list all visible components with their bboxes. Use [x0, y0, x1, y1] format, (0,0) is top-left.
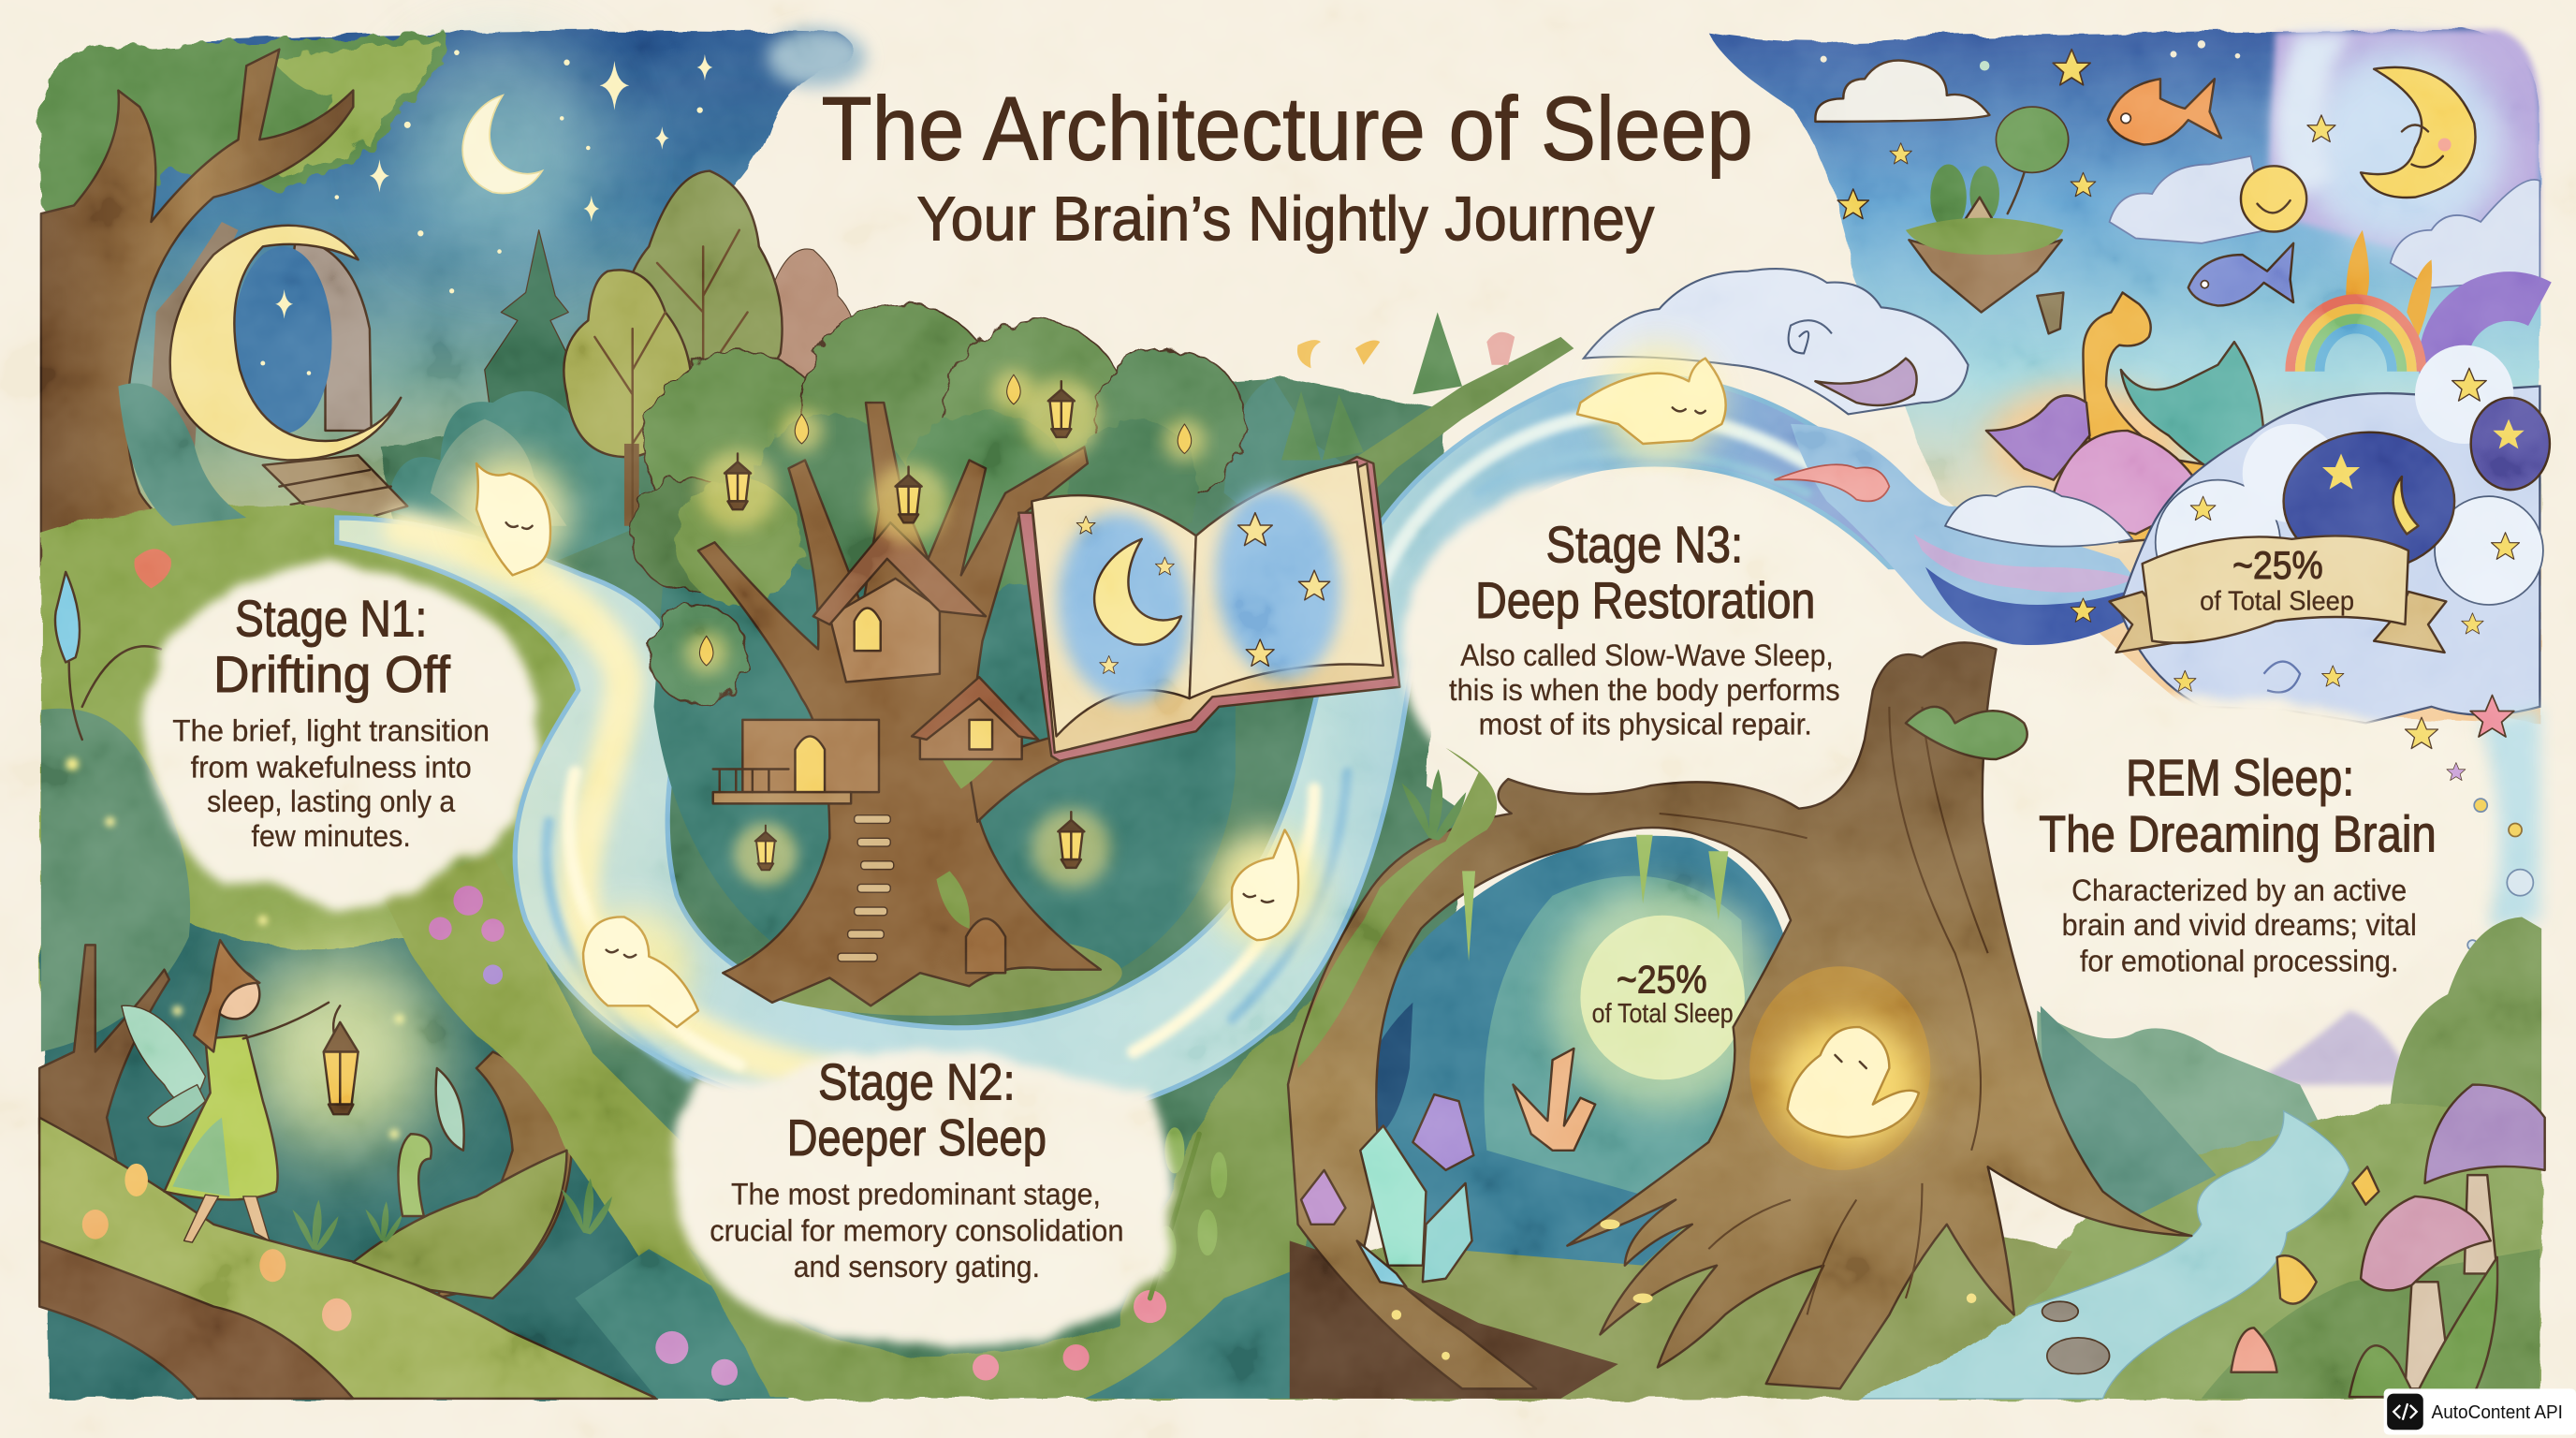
sun-lit leaves — [250, 39, 437, 174]
lanterns — [698, 378, 1110, 888]
ribbon banner — [2110, 536, 2446, 653]
trunk and branches — [41, 50, 353, 567]
forest base under the river — [378, 378, 1479, 1399]
text block: stage N2 — [710, 1053, 1123, 1284]
ladder — [838, 815, 894, 961]
pink distant tree — [764, 249, 856, 427]
right page — [1190, 462, 1383, 698]
cloud bank stars — [2071, 368, 2520, 691]
crystals — [1301, 1094, 1473, 1287]
head and hair — [211, 970, 259, 1019]
moss bank beside river — [386, 855, 755, 1314]
book stars — [1076, 513, 1330, 673]
grass tuft — [1401, 770, 1466, 841]
door — [966, 918, 1005, 973]
tall olive tree — [621, 171, 783, 419]
navy starry bubble — [2284, 433, 2454, 570]
front yellow tree — [564, 270, 692, 457]
text block: stage N2: Stage N2: — [818, 1053, 1016, 1110]
dark forest disc — [654, 550, 1236, 1009]
text block: REM sleep: for emotional processing. — [2080, 944, 2398, 977]
small flowers — [2231, 1167, 2378, 1372]
pale moon halo — [2300, 46, 2504, 250]
crescent gate — [170, 226, 401, 461]
lavender swirl — [2267, 30, 2539, 287]
moon glow — [399, 50, 603, 253]
watermark: AutoContent API — [2432, 1402, 2563, 1423]
dots — [1821, 40, 2240, 70]
cloud curl — [1789, 320, 1832, 353]
text block: stage N1 — [172, 590, 490, 853]
side branch — [970, 730, 1134, 822]
glowing currents — [402, 414, 1914, 1085]
text block: stage N2: The most predominant stage, — [731, 1178, 1101, 1211]
foreground leaves — [2349, 1257, 2497, 1397]
text block: stage N3: Stage N3: — [1546, 516, 1743, 573]
tulips — [82, 1164, 352, 1331]
lilac whale — [1815, 359, 1917, 405]
root trunk — [435, 1051, 572, 1299]
callout: N3 share — [1592, 957, 1734, 1029]
river of sleep — [337, 375, 1939, 1129]
pink flowers — [429, 886, 505, 985]
stones — [2042, 1301, 2110, 1374]
deep root tree — [1288, 642, 2191, 1399]
cloud with swirl — [1584, 269, 1969, 414]
rem bubbles — [2467, 799, 2533, 950]
navy band — [1925, 567, 2152, 645]
bottom ground centre — [575, 1003, 1314, 1399]
yellow horn — [2346, 230, 2432, 337]
hills — [2037, 1011, 2333, 1249]
arm and lantern handle — [243, 1003, 340, 1044]
cream fade edge — [1725, 102, 1856, 337]
text block: stage N2: and sensory gating. — [794, 1250, 1040, 1284]
purple critter — [1986, 395, 2089, 480]
mountain — [2250, 1011, 2415, 1085]
scene: dream sky — [1584, 30, 2539, 723]
yellow dino — [2083, 292, 2291, 542]
small rock — [2037, 292, 2063, 333]
lantern light — [238, 950, 442, 1153]
right trees — [2391, 917, 2541, 1134]
stars — [1837, 50, 2335, 219]
icon: fairy lantern — [324, 1022, 359, 1114]
glowing pebbles — [1392, 1220, 1976, 1360]
blue lily left — [55, 549, 171, 740]
cream below N3 — [1922, 649, 2185, 772]
cave — [1363, 836, 1794, 1266]
dress — [165, 1035, 278, 1199]
scene: forest night sky — [50, 28, 866, 559]
dark foreground green — [2202, 1249, 2539, 1399]
forest lower left — [39, 709, 788, 1399]
page edges — [1032, 463, 1393, 753]
text block: REM sleep: The Dreaming Brain — [2039, 805, 2437, 862]
text block: REM sleep: brain and vivid dreams; vital — [2062, 908, 2417, 942]
lilac band — [1914, 535, 2136, 593]
pale sky arc — [2274, 33, 2352, 198]
cave light — [1551, 886, 1775, 1109]
blue fish — [2188, 243, 2293, 306]
winding stream — [1843, 1111, 2349, 1399]
canopy — [631, 304, 1245, 703]
book moon — [1094, 539, 1181, 645]
wings — [122, 1005, 205, 1104]
teal hill — [2041, 1005, 2217, 1216]
N3 text clearing — [1403, 473, 1903, 787]
stone arch — [292, 239, 372, 431]
pine tree — [485, 230, 575, 431]
rem blue strip — [2481, 707, 2539, 929]
bark lines — [1660, 707, 1988, 1314]
trunk and branches — [698, 403, 1101, 1005]
crescent moon — [462, 95, 542, 194]
text block: stage N1: from wakefulness into — [191, 750, 472, 784]
moss on arch — [1298, 748, 1497, 1068]
violet starry bubble — [2471, 398, 2550, 490]
porch cabin — [713, 720, 879, 803]
title: The Architecture of Sleep — [822, 79, 1753, 179]
dark pocket — [1357, 1003, 1412, 1142]
text block: stage N2: crucial for memory consolidation — [710, 1213, 1123, 1247]
pine hedge on river bank — [1224, 313, 1573, 550]
spirit N3 right of tree — [1209, 829, 1321, 944]
text block: stage N3: Also called Slow-Wave Sleep, — [1460, 638, 1834, 672]
fairy with lantern — [122, 940, 340, 1242]
leaf plants — [436, 1068, 464, 1151]
watermark — [2384, 1388, 2576, 1434]
text block: stage N2: Deeper Sleep — [787, 1109, 1046, 1167]
text block: stage N1: The brief, light transition — [172, 714, 490, 748]
background trees — [148, 171, 856, 567]
watercolor washes — [1048, 506, 1199, 710]
left big tree — [39, 33, 446, 567]
text block: stage N1: few minutes. — [252, 819, 411, 853]
white puffs — [2156, 345, 2543, 605]
REM text clearing — [1963, 697, 2507, 1016]
tree with arch and roots — [1288, 642, 2191, 1388]
closed eyes — [1835, 1055, 1866, 1068]
text block: stage N3: Deep Restoration — [1475, 572, 1815, 629]
orange fish — [2108, 79, 2221, 144]
bush beside text — [41, 709, 190, 1051]
stars in the sky — [335, 50, 712, 293]
text block: REM sleep: Characterized by an active — [2071, 873, 2407, 907]
text block: stage N3: this is when the body performs — [1449, 673, 1840, 707]
orange crystals — [1513, 1049, 1595, 1151]
vine stalactites — [1462, 835, 1728, 961]
rem stars — [2406, 696, 2514, 781]
cave inner — [1484, 876, 1749, 1199]
teal bushes — [386, 391, 641, 567]
left young tree — [39, 945, 169, 1266]
treehouse scene — [631, 304, 1245, 1016]
tree leaves — [1906, 707, 2027, 759]
slender trunks — [148, 222, 238, 461]
leaf glows — [685, 370, 1206, 674]
N2 text clearing — [673, 1049, 1172, 1346]
green whale — [2121, 342, 2264, 493]
text block: stage N1: sleep, lasting only a — [207, 785, 456, 818]
peach sunset glow — [1988, 387, 2185, 501]
moss — [929, 715, 1018, 929]
left tree canopy — [39, 33, 446, 217]
callout: REM share — [2200, 543, 2354, 616]
small cabin — [912, 677, 1038, 759]
moon arch doorway — [170, 226, 407, 529]
dream river tail — [1775, 424, 2152, 645]
legs — [184, 1195, 270, 1242]
portal sky — [233, 246, 332, 433]
spirit N1 — [457, 457, 568, 575]
sleeping spirit — [1788, 1027, 1919, 1137]
upper cabin — [813, 522, 986, 682]
spirit on river arch — [1577, 344, 1726, 462]
fireflies — [66, 757, 404, 1139]
callout: N3 share: of Total Sleep — [1592, 999, 1734, 1029]
floating island — [1906, 107, 2069, 313]
REM valley — [1843, 917, 2545, 1401]
text block: REM sleep: REM Sleep: — [2126, 750, 2354, 807]
teal bush by arch — [118, 383, 246, 526]
top cloud — [1815, 61, 1989, 122]
mossy ground — [39, 1118, 657, 1399]
grassy mound — [735, 931, 1122, 1016]
sky edge wash — [768, 28, 866, 87]
magic open book — [1018, 457, 1399, 761]
text block: REM sleep — [2039, 750, 2437, 977]
pink mushroom — [2361, 1196, 2491, 1388]
valley ground — [1939, 1101, 2541, 1401]
hollow glow — [1749, 966, 1930, 1170]
callout: REM share: ~25% — [2232, 543, 2323, 587]
rainbow — [2291, 297, 2539, 387]
stone steps — [263, 455, 407, 529]
text block: stage N1: Stage N1: — [235, 590, 427, 647]
cover — [1018, 457, 1399, 761]
small cloud — [1945, 487, 2132, 547]
fallen root — [39, 1240, 353, 1399]
ferns and flowers — [292, 1179, 741, 1382]
moss hill behind stage N1 — [41, 505, 587, 1019]
big smiling moon — [2361, 67, 2475, 198]
pink ribbon — [1775, 464, 1889, 501]
earth and moss ground — [1298, 1167, 2070, 1399]
sun face — [2241, 166, 2306, 232]
little clouds — [2110, 156, 2539, 287]
dark soil — [1290, 1240, 1618, 1399]
callout: N3 share: ~25% — [1617, 957, 1707, 1001]
purple mushroom — [2425, 1085, 2545, 1273]
callout: REM share: of Total Sleep — [2200, 586, 2354, 616]
second slope — [353, 1151, 567, 1299]
swirl — [2264, 662, 2300, 692]
text block: stage N3: most of its physical repair. — [1479, 708, 1812, 741]
left page — [1032, 495, 1196, 736]
text block: stage N1: Drifting Off — [213, 646, 451, 703]
N1 text clearing — [143, 559, 538, 909]
portal stars — [260, 289, 311, 375]
glowing glade bush — [431, 419, 567, 526]
dream cloud bank — [2071, 345, 2550, 723]
subtitle: Your Brain’s Nightly Journey — [916, 184, 1655, 254]
text block: stage N3 — [1449, 516, 1840, 741]
pink shell — [2054, 431, 2193, 535]
spirit N2 — [574, 911, 698, 1029]
